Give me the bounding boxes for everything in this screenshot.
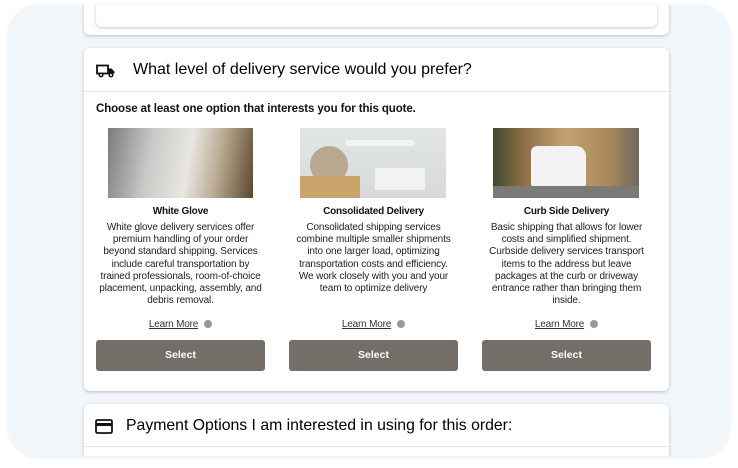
option: curb side: Curb Side Delivery [524,206,609,217]
subheading: Choose at least one option that interests you for this quote. [96,103,416,115]
option: consolidated: combine multiple smaller shipments [296,234,451,245]
icon: card [95,419,113,434]
panel: payment options [84,404,669,468]
panel: delivery service [84,48,669,391]
button [289,340,458,371]
button [482,340,651,371]
option: consolidated: team to optimize delivery [320,283,427,294]
option: curb side: packages at the curb or driveway [495,271,638,282]
image: curb side [493,128,639,198]
image: consolidated [300,128,446,198]
option: white glove: include careful transportation by [112,259,249,270]
option: white glove: placement, unpacking, assembly, and [99,283,262,294]
heading: What level of delivery service would you prefer? [133,61,472,78]
option: curb side: inside. [552,295,581,306]
option: consolidated: into one larger load, optimizing [307,246,440,257]
option: consolidated: We work closely with you and your [299,271,448,282]
option: consolidated: Consolidated Delivery [323,206,424,217]
option: white glove: Learn More [149,319,198,330]
option: white glove [96,128,265,371]
option: consolidated: transportation costs and efficiency. [299,259,448,270]
option: curb side: Learn More [535,319,584,330]
button: Select [358,349,389,361]
button [96,340,265,371]
option: curb side: costs and simplified shipment. [502,234,631,245]
inner card [96,0,657,27]
button: Select [165,349,196,361]
option: curb side: Basic shipping that allows for lower [491,222,642,233]
image: white glove [108,128,253,198]
option: curb side [482,128,651,371]
button: Select [551,349,582,361]
option: white glove: trained professionals, room-of-choice [100,271,261,282]
heading: Payment Options I am interested in using for this order: [126,417,512,434]
option: white glove: beyond standard shipping. Services [103,246,258,257]
option: consolidated: Consolidated shipping services [306,222,441,233]
option: white glove: White Glove [153,206,208,217]
option: curb side: Curbside delivery services transport [489,246,644,257]
option: white glove: debris removal. [147,295,214,306]
option: consolidated: Learn More [342,319,391,330]
option: consolidated [289,128,458,371]
option: white glove: White glove delivery services offer [107,222,254,233]
option: white glove: premium handling of your order [113,234,248,245]
icon: truck [96,64,114,78]
option: curb side: entrance rather than bringing them [492,283,641,294]
option: curb side: items to the address but leave [502,259,631,270]
top card [84,0,669,35]
